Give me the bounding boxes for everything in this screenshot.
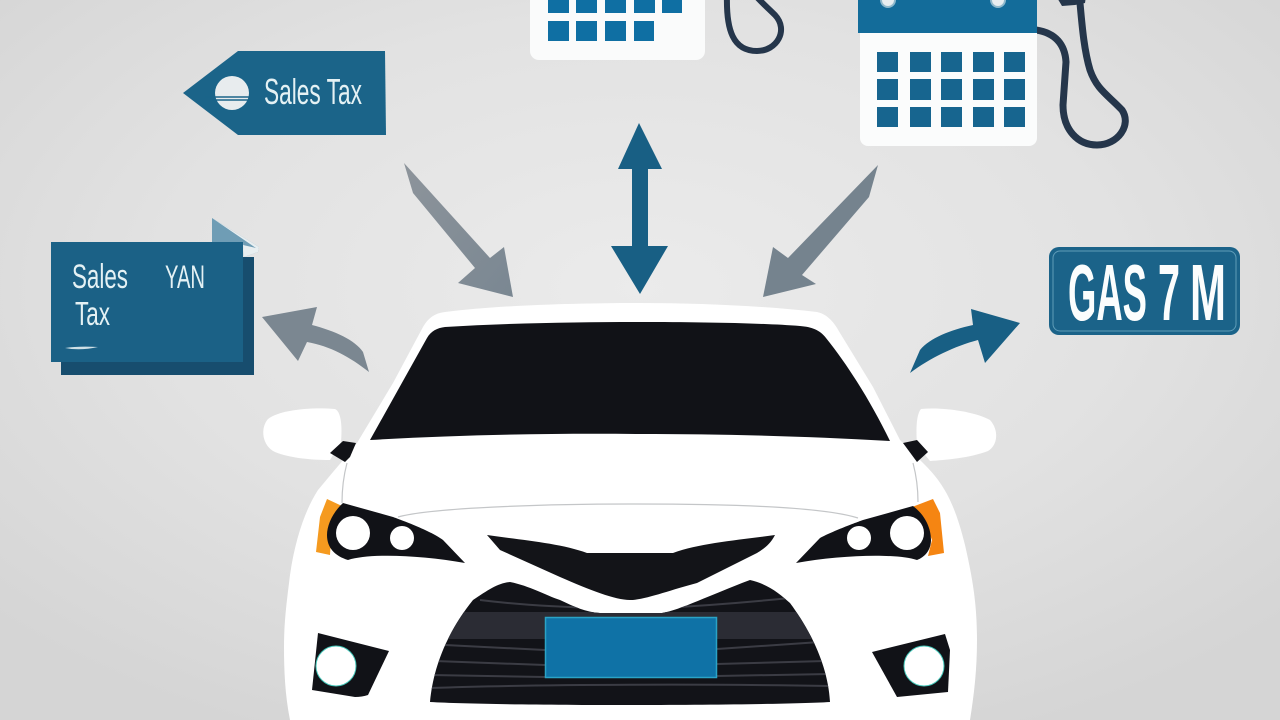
left mirror: [263, 408, 341, 460]
arrow: curved to gas sign: [910, 309, 1020, 373]
icon: tag hole: [205, 76, 250, 110]
license plate: [546, 618, 716, 678]
sign label: GAS: [1068, 248, 1147, 337]
upper grille: [487, 535, 775, 600]
lower grille: [425, 575, 835, 710]
car: [263, 303, 996, 720]
right fog light: [872, 634, 950, 697]
windshield: [370, 322, 890, 441]
sign label: M: [1190, 248, 1226, 337]
card text: [72, 258, 205, 332]
price tag: sales tax: [183, 51, 386, 135]
arrow: diagonal from top right to car: [763, 165, 878, 297]
note card: sales tax: [51, 218, 259, 375]
right mirror: [916, 409, 996, 461]
icon: calendar with fuel hose, top centre: [530, 0, 781, 60]
arrow: curved to note card: [262, 307, 369, 372]
sign: GAS 7 M: [1049, 247, 1240, 337]
right headlight: [796, 499, 944, 563]
sign label: 7: [1158, 248, 1180, 337]
arrow: diagonal from top left to car: [404, 163, 513, 297]
tag label: Sales Tax: [264, 71, 362, 112]
hood lines: [342, 463, 918, 518]
card text: Sales: [72, 258, 128, 296]
left mirror mount: [330, 441, 356, 462]
car body: [284, 303, 977, 720]
arrow: vertical double-headed: [611, 123, 668, 294]
right mirror mount: [903, 440, 928, 462]
icon: calendar with fuel hose, top right: [858, 0, 1125, 146]
card text: YAN: [165, 259, 205, 295]
card text: Tax: [75, 295, 110, 332]
left fog light: [312, 633, 389, 697]
left headlight: [316, 499, 465, 563]
